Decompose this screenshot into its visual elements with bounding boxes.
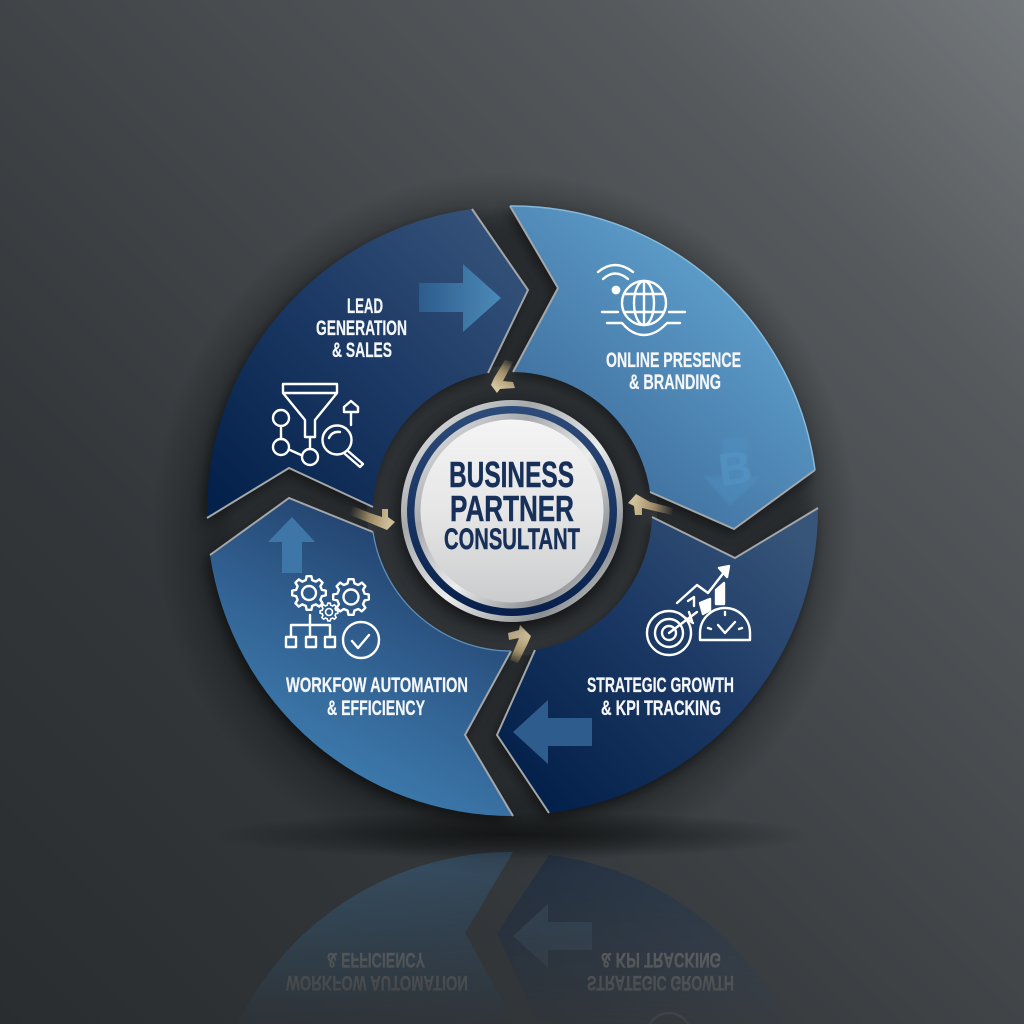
label [316, 294, 407, 362]
segment shape [207, 209, 528, 518]
label [286, 673, 468, 720]
direction arrow [419, 264, 501, 332]
segment bevel [210, 498, 513, 816]
gold arrow: top [491, 360, 515, 393]
gold arrow: bottom [508, 625, 531, 663]
reflection of lower segments [250, 852, 734, 1020]
segment shape [497, 508, 818, 813]
icon: funnel and magnifier [273, 384, 363, 467]
icon: target, trend and gauge [647, 566, 750, 655]
badge title: BUSINESS [449, 454, 574, 495]
reflection of lower segments: STRATEGIC GROWTH [587, 971, 734, 995]
segment bevel [510, 206, 815, 529]
badge title: PARTNER [450, 488, 574, 529]
badge title [444, 454, 580, 556]
direction arrow with coin glyph: B [715, 440, 755, 496]
badge outer silver ring [401, 400, 623, 622]
label: & KPI TRACKING [601, 696, 721, 720]
center badge [401, 400, 623, 622]
badge face [420, 420, 604, 602]
segment rim highlight [510, 206, 815, 470]
segment bevel [497, 508, 818, 813]
label: WORKFOW AUTOMATION [286, 673, 468, 697]
panel: workflow automation and efficiency [210, 498, 513, 816]
label: & SALES [332, 338, 392, 362]
gold arrow: left [350, 505, 395, 530]
label: LEAD [347, 294, 383, 318]
segment bevel [207, 209, 528, 518]
panel: strategic growth and KPI tracking [497, 508, 818, 813]
direction arrow [268, 517, 315, 573]
segment rim highlight [373, 532, 511, 651]
panel: online presence and branding [510, 206, 815, 529]
label: STRATEGIC GROWTH [587, 673, 734, 697]
reflection of lower segments: & EFFICIENCY [327, 948, 425, 972]
label: ONLINE PRESENCE [606, 348, 741, 372]
reflection of lower segments: WORKFOW AUTOMATION [286, 971, 468, 995]
label: & EFFICIENCY [327, 696, 425, 720]
label: & BRANDING [629, 370, 721, 394]
icon: globe and wifi [598, 265, 685, 335]
label [606, 348, 741, 394]
badge navy ring [407, 406, 617, 616]
direction arrow [513, 700, 592, 764]
icon: gears and workflow [286, 576, 379, 658]
inner ring zone [367, 366, 657, 656]
badge inner silver ring [414, 414, 610, 608]
wheel backdrop shadow [152, 172, 856, 876]
label [587, 673, 734, 720]
ground shadow [212, 811, 812, 859]
gold arrow: right [628, 494, 673, 515]
segment shape [210, 498, 513, 816]
wheel dark base [207, 206, 817, 816]
segment shape [510, 206, 815, 529]
reflection of lower segments: & KPI TRACKING [601, 948, 721, 972]
badge title: CONSULTANT [444, 523, 580, 556]
label: GENERATION [316, 316, 407, 340]
direction arrow with coin glyph [703, 438, 762, 506]
panel: lead generation and sales [207, 209, 528, 518]
